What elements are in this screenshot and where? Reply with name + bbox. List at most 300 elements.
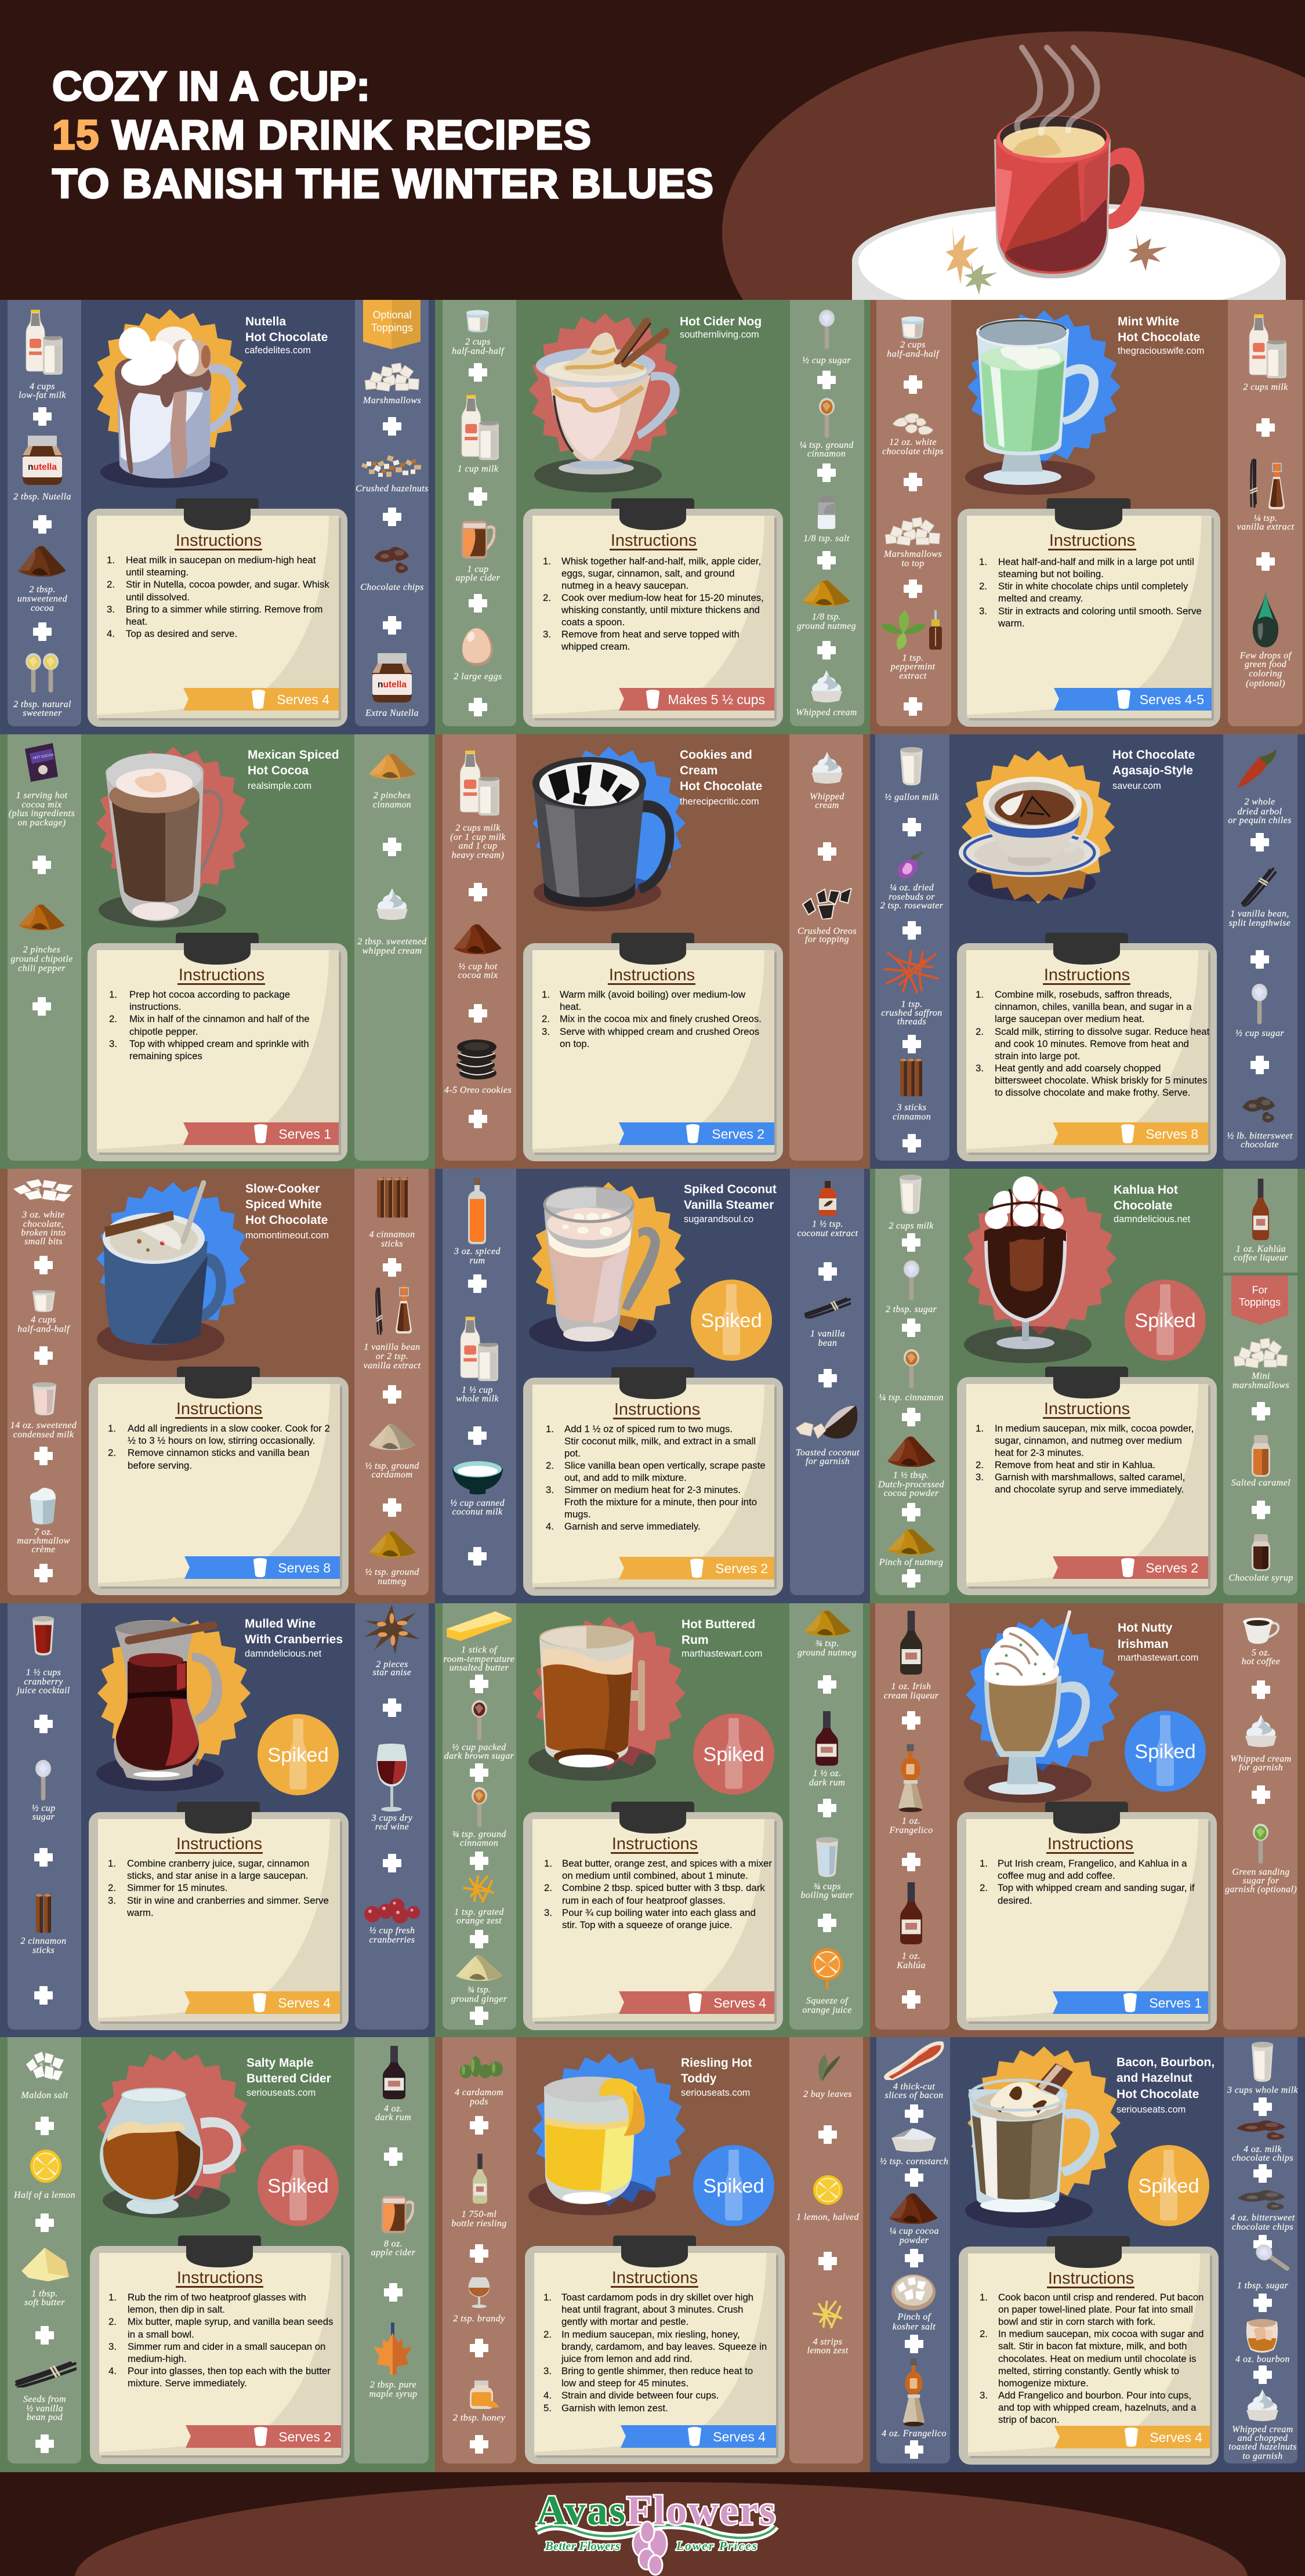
ingredient: vanilla bean or extract: or 2 tsp. xyxy=(376,1352,408,1361)
hero mug xyxy=(994,115,1144,278)
title: Buttered Cider xyxy=(246,2072,331,2085)
left ingredients column xyxy=(443,2037,516,2463)
ingredient: whole milk: 3 cups whole milk xyxy=(1227,2085,1298,2095)
title: Rum xyxy=(682,1633,709,1647)
ingredient: nutmeg: nutmeg xyxy=(378,1577,407,1586)
ingredient: bay leaves xyxy=(803,2055,852,2099)
title: Hot Chocolate xyxy=(245,331,328,344)
icon: plus xyxy=(469,698,487,716)
servings ribbon: Serves 4 xyxy=(278,1995,331,2010)
title: thegraciouswife.com xyxy=(1118,346,1204,356)
ingredient: milk: 2 cups milk xyxy=(455,823,501,833)
icon: plus xyxy=(1253,2097,1272,2116)
icon: plus xyxy=(817,463,836,482)
panel background xyxy=(435,300,870,734)
instruction steps: Prep hot cocoa according to package xyxy=(129,989,290,1000)
ingredient: nutmeg xyxy=(798,1610,857,1658)
ingredient: saffron: 1 tsp. xyxy=(901,999,923,1009)
ingredient: whipped cream and hazelnuts: to garnish xyxy=(1242,2451,1283,2461)
ingredient: cocoa: cocoa xyxy=(31,603,54,613)
icon: plus xyxy=(383,1854,401,1872)
left ingredients column xyxy=(875,1169,949,1595)
title: Mulled Wine xyxy=(245,1617,316,1631)
instruction steps: 1. xyxy=(980,2292,988,2303)
topping: crushed hazelnuts xyxy=(356,455,429,494)
instruction steps: whipped cream. xyxy=(561,641,630,652)
instruction steps: 1. xyxy=(543,2292,552,2303)
instruction steps: on medium until combined, about 1 minute. xyxy=(562,1870,748,1881)
ingredient: orange juice: Squeeze of xyxy=(806,1996,849,2006)
servings ribbon: Serves 1 xyxy=(278,1126,331,1142)
servings ribbon: Serves 4 xyxy=(277,692,329,707)
ingredient: cranberry juice: 1 ½ cups xyxy=(26,1668,61,1678)
ingredient: dark rum xyxy=(809,1711,845,1788)
instruction steps: 4. xyxy=(543,2390,552,2401)
badge: spiked: Spiked xyxy=(701,1310,762,1332)
icon: plus xyxy=(905,2249,923,2267)
ingredient: white chocolate: small bits xyxy=(24,1237,63,1247)
instruction steps: strip of bacon. xyxy=(998,2414,1059,2425)
ingredient: food coloring: green food xyxy=(1245,660,1287,669)
icon: plus xyxy=(469,1110,487,1128)
topping: crushed hazelnuts: Crushed hazelnuts xyxy=(356,484,429,494)
ingredient: peppermint extract: peppermint xyxy=(890,662,936,672)
steam xyxy=(1017,48,1097,133)
icon: plus xyxy=(902,1503,920,1521)
right ingredients column xyxy=(790,300,864,726)
instruction steps: Top with whipped cream and sanding sugar, if xyxy=(998,1882,1195,1893)
ingredient: butter: 1 stick of xyxy=(461,1645,498,1655)
instruction steps: 1. xyxy=(976,1423,984,1434)
topping: whipped cream: Whipped cream xyxy=(1230,1754,1292,1764)
ingredient: soft butter: soft butter xyxy=(24,2298,65,2307)
right ingredients column xyxy=(354,1169,429,1595)
ingredient: hot coffee: hot coffee xyxy=(1242,1657,1280,1666)
banner: for toppings: Toppings xyxy=(1239,1296,1281,1308)
icon: plus xyxy=(1253,2365,1272,2384)
instruction steps: 1. xyxy=(107,555,115,566)
ingredient: marshmallow creme: marshmallow xyxy=(17,1536,70,1546)
ingredient: star anise: star anise xyxy=(373,1668,411,1678)
ingredient: sugar xyxy=(802,310,851,365)
ingredient: cinnamon: ¼ tsp. cinnamon xyxy=(879,1393,944,1403)
icon: plus xyxy=(383,1258,401,1277)
ingredient: Maldon salt xyxy=(20,2052,68,2100)
ingredient: maple syrup: maple syrup xyxy=(369,2389,418,2399)
instruction steps: 2. xyxy=(109,1013,117,1024)
icon: plus xyxy=(34,1346,53,1365)
header brown arch xyxy=(722,31,1305,433)
title: therecipecritic.com xyxy=(680,796,759,807)
ingredient: marshmallows: Marshmallows xyxy=(883,549,942,559)
icon: plus xyxy=(902,1408,920,1426)
ingredient: food coloring xyxy=(1239,592,1292,689)
ingredient: milk chocolate chips: 4 oz. milk xyxy=(1244,2144,1282,2154)
instructions heading: Instructions xyxy=(177,2269,263,2287)
ingredient: cocoa: unsweetened xyxy=(17,594,68,604)
instruction steps: 2. xyxy=(546,1460,554,1471)
ingredient: bittersweet chocolate: chocolate xyxy=(1241,1140,1279,1150)
ingredient: milk xyxy=(458,395,499,474)
title: Mexican Spiced xyxy=(248,748,339,762)
ingredient: butter: room-temperature xyxy=(444,1654,514,1664)
instruction steps: 3. xyxy=(976,1063,984,1074)
ingredient: cinnamon: 2 pinches xyxy=(374,791,411,800)
topping: green sanding sugar: Green sanding xyxy=(1232,1867,1290,1877)
ingredient: vanilla bean: 1 vanilla xyxy=(810,1329,845,1339)
ingredient: cranberries: cranberries xyxy=(369,1935,415,1945)
title: Hot Cocoa xyxy=(248,764,309,777)
ingredient: whipped cream and hazelnuts: toasted hazelnuts xyxy=(1228,2442,1297,2452)
instruction steps: Bring to gentle shimmer, then reduce heat to xyxy=(561,2365,753,2376)
icon: plus xyxy=(470,2006,488,2025)
ingredient: cocoa powder: cocoa powder xyxy=(883,1488,939,1498)
instructions clipboard xyxy=(959,2236,1219,2465)
ingredient: toasted coconut: for garnish xyxy=(806,1457,850,1466)
ingredient: eggs xyxy=(454,628,502,682)
icon: plus xyxy=(1250,833,1269,852)
ingredient: nutmeg: ground nutmeg xyxy=(798,1648,857,1658)
instruction steps: Whisk together half-and-half, milk, apple cider, xyxy=(561,556,761,567)
title: Hot Chocolate xyxy=(1112,748,1195,762)
servings ribbon xyxy=(184,1991,340,2014)
icon: plus xyxy=(818,1675,836,1694)
table with leaves xyxy=(852,203,1286,300)
ingredient: white chocolate xyxy=(13,1179,73,1247)
title xyxy=(680,315,762,340)
ingredient: Kahlua xyxy=(896,1882,926,1970)
ingredient: chiles: or pequín chiles xyxy=(1228,816,1292,825)
icon: plus xyxy=(468,1274,487,1293)
topping: extra Nutella: Extra Nutella xyxy=(365,708,419,718)
drink illustration: buttered rum glass xyxy=(528,1617,686,1781)
instruction steps: 3. xyxy=(109,1038,117,1049)
icon: plus xyxy=(383,1385,401,1404)
instruction steps: 2. xyxy=(108,1882,116,1893)
servings ribbon xyxy=(1053,1122,1208,1145)
title: Vanilla Steamer xyxy=(684,1198,774,1212)
icon: plus xyxy=(818,2125,837,2144)
ingredient: nutmeg: ground nutmeg xyxy=(797,621,856,631)
instructions clipboard xyxy=(90,2236,350,2464)
right ingredients column xyxy=(1223,1603,1297,2030)
instruction steps: 2. xyxy=(976,1459,984,1470)
servings ribbon: Serves 1 xyxy=(1149,1995,1202,2010)
ingredient: honey xyxy=(453,2381,506,2423)
instruction steps: brandy, cardamom, and bay leaves. Squeeze in xyxy=(561,2341,767,2352)
instructions clipboard xyxy=(957,933,1217,1161)
ingredient: whipped cream and hazelnuts: Whipped cream xyxy=(1232,2425,1293,2434)
title xyxy=(1114,1183,1191,1224)
title: TO BANISH THE WINTER BLUES xyxy=(52,161,713,207)
ingredient: milk: heavy cream) xyxy=(452,850,504,860)
title: Hot Cider Nog xyxy=(680,315,762,328)
ingredient: cardamom: ½ tsp. ground xyxy=(365,1461,419,1471)
ingredient: sugar xyxy=(1237,2241,1293,2291)
icon: plus xyxy=(1253,2235,1272,2253)
ingredient: half-and-half xyxy=(452,310,505,356)
ingredient: Frangelico: Frangelico xyxy=(889,1825,933,1835)
ingredient: whipped cream xyxy=(357,888,427,956)
instructions clipboard xyxy=(523,498,783,727)
title: Mint White xyxy=(1118,315,1179,328)
panel background xyxy=(870,1603,1305,2038)
icon: plus xyxy=(1250,1056,1269,1074)
ingredient: Maldon salt: Maldon salt xyxy=(20,2090,68,2100)
icon: plus xyxy=(383,1498,401,1517)
ingredient: vanilla bean: split lengthwise xyxy=(1229,918,1290,928)
icon: plus xyxy=(1252,1680,1270,1699)
instruction steps: 2. xyxy=(108,1447,116,1458)
ingredient: bittersweet chocolate xyxy=(1227,1097,1293,1150)
ingredient: chipotle: chili pepper xyxy=(18,963,66,973)
icon: plus xyxy=(384,2283,403,2302)
ingredient: orange zest: orange zest xyxy=(456,1916,502,1926)
ingredient: cinnamon sticks: 3 sticks xyxy=(897,1103,926,1113)
ingredient: dark rum xyxy=(375,2046,411,2122)
icon: plus xyxy=(469,594,487,613)
icon: plus xyxy=(1252,1402,1270,1421)
ingredient: sugar: ½ cup sugar xyxy=(802,356,851,365)
title: With Cranberries xyxy=(245,1633,343,1646)
header background xyxy=(0,0,1305,300)
drink illustration: blue mug xyxy=(96,1182,249,1361)
ingredient: vanilla bean: 1 vanilla bean, xyxy=(1230,909,1289,919)
ingredient: coconut extract: 1 ½ tsp. xyxy=(812,1219,843,1229)
ingredient: cinnamon sticks: cinnamon xyxy=(893,1112,931,1122)
instructions heading: Instructions xyxy=(612,1835,698,1853)
instruction steps: chipotle pepper. xyxy=(129,1026,198,1037)
ingredient: marshmallows: to top xyxy=(901,559,925,568)
instruction steps: In medium saucepan, mix milk, cocoa powder, xyxy=(995,1423,1194,1434)
banner: for toppings xyxy=(1231,1276,1288,1325)
ingredient: cardamom pods: 4 cardamom xyxy=(455,2088,503,2097)
ingredient: lemon zest: 4 strips xyxy=(813,2337,842,2347)
title: Slow-Cooker xyxy=(245,1182,320,1195)
ingredient: half-and-half: half-and-half xyxy=(887,349,940,359)
instruction steps xyxy=(108,2292,333,2389)
ingredient: milk: (or 1 cup milk xyxy=(450,832,506,842)
instruction steps xyxy=(976,989,1210,1098)
instruction steps: 1. xyxy=(108,1858,116,1869)
ingredient: lemon: 1 lemon, halved xyxy=(796,2212,859,2222)
drink illustration: steamer glass xyxy=(529,1182,685,1352)
ingredient: cardamom pods xyxy=(455,2056,503,2107)
topping: marshmallows: Marshmallows xyxy=(362,396,421,405)
ingredient: red wine xyxy=(371,1744,413,1832)
ingredient: vanilla bean seeds: bean pod xyxy=(27,2412,63,2422)
instructions clipboard xyxy=(525,2236,785,2464)
ingredient: white chocolate chips: chocolate chips xyxy=(882,447,944,456)
ingredient: half-and-half: 2 cups xyxy=(900,340,926,350)
ingredient: white chocolate: chocolate, xyxy=(23,1219,64,1229)
icon: plus xyxy=(1252,1501,1270,1519)
instruction steps: warm. xyxy=(998,618,1025,629)
ingredient: vanilla bean xyxy=(1229,868,1290,928)
icon: plus xyxy=(33,515,52,534)
card: Spiked Coconut Vanilla Steamer xyxy=(435,1169,870,1603)
instruction steps: Add all ingredients in a slow cooker. Cook for 2 xyxy=(128,1423,330,1434)
instructions heading: Instructions xyxy=(1047,1835,1133,1853)
ingredient: lemon zest xyxy=(807,2302,849,2356)
panel background xyxy=(435,2037,870,2472)
title: Irishman xyxy=(1118,1637,1169,1651)
ingredient: cocoa xyxy=(17,546,68,613)
icon: plus xyxy=(34,1848,53,1867)
instruction steps: on top. xyxy=(560,1038,589,1049)
ingredient: ginger: ¾ tsp. xyxy=(467,1985,491,1995)
ingredient: peppermint extract: extract xyxy=(899,671,927,681)
ingredient: Oreo cookies: 4-5 Oreo cookies xyxy=(444,1085,512,1095)
panel background xyxy=(0,300,435,734)
left ingredients column xyxy=(875,734,949,1161)
ingredient: Irish cream xyxy=(884,1611,939,1701)
title: Riesling Hot xyxy=(681,2056,752,2070)
icon: plus xyxy=(1256,418,1275,437)
instructions clipboard xyxy=(958,498,1220,727)
instruction steps: rum in each of four heatproof glasses. xyxy=(562,1895,726,1906)
ingredient: half-and-half xyxy=(17,1290,71,1334)
title: Hot Chocolate xyxy=(1118,331,1200,344)
topping: whipped cream: Whipped xyxy=(810,792,844,802)
left ingredients column xyxy=(443,1169,516,1595)
ingredient: red wine: red wine xyxy=(375,1822,409,1832)
panel background xyxy=(870,300,1305,734)
title xyxy=(245,1182,329,1241)
badge: spiked: Spiked xyxy=(703,1744,764,1766)
title: Cookies and xyxy=(680,748,752,762)
ingredient: salt xyxy=(803,495,850,544)
drink illustration: Irish coffee glass xyxy=(964,1612,1119,1803)
instructions clipboard xyxy=(88,498,347,727)
ingredient: bittersweet chocolate chips: chocolate chips xyxy=(1232,2222,1293,2232)
card: Nutella Hot Chocolate xyxy=(0,300,435,734)
ingredient: nutmeg: ½ tsp. ground xyxy=(365,1567,419,1577)
badge: spiked: Spiked xyxy=(1138,2175,1199,2197)
servings ribbon: Serves 8 xyxy=(278,1560,331,1575)
servings ribbon xyxy=(186,2425,341,2448)
icon: plus xyxy=(34,1986,53,2005)
title: Kahlua Hot xyxy=(1114,1183,1178,1197)
ingredient: half-and-half: half-and-half xyxy=(452,346,505,356)
right ingredients column xyxy=(789,1603,863,2030)
title: Bacon, Bourbon, xyxy=(1116,2056,1215,2069)
instruction steps: ½ to 3 ½ hours on low, stirring occasionally. xyxy=(128,1435,315,1446)
title: southernliving.com xyxy=(680,329,759,340)
icon: plus xyxy=(32,856,51,874)
icon: plus xyxy=(818,1799,836,1817)
title xyxy=(681,2056,752,2098)
topping: whipped cream: for garnish xyxy=(1239,1763,1283,1773)
instructions heading: Instructions xyxy=(1044,966,1130,984)
ingredient: cinnamon: ¼ tsp. ground xyxy=(799,440,854,450)
instruction steps: Pour into glasses, then top each with the butter xyxy=(128,2365,331,2376)
panel background xyxy=(0,1169,435,1603)
icon: plus xyxy=(34,1256,53,1274)
instruction steps: Beat butter, orange zest, and spices with a mixer xyxy=(562,1858,772,1869)
ingredient: natural sweetener: sweetener xyxy=(23,708,62,718)
ingredient: saffron: crushed saffron xyxy=(881,1008,942,1018)
instruction steps: 1. xyxy=(108,2292,117,2303)
icon: plus xyxy=(817,641,836,660)
instruction steps: heat for 2-3 minutes. xyxy=(995,1447,1084,1458)
instruction steps: 3. xyxy=(108,2341,117,2352)
badge: spiked xyxy=(691,1280,772,1361)
title: Spiced White xyxy=(245,1198,322,1211)
ingredient: boiling water: ¾ cups xyxy=(813,1882,841,1892)
ingredient: white chocolate: 3 oz. white xyxy=(21,1210,65,1220)
ingredient: Kahlua: 1 oz. Kahlúa xyxy=(1236,1244,1286,1254)
title: damndelicious.net xyxy=(1114,1214,1191,1224)
ingredient: nutmeg: ¾ tsp. xyxy=(815,1639,839,1649)
title: seriouseats.com xyxy=(246,2088,316,2098)
banner: optional toppings: Optional xyxy=(372,309,412,321)
ingredient: chipotle: 2 pinches xyxy=(23,945,60,955)
servings ribbon: Serves 2 xyxy=(1146,1560,1198,1575)
instruction steps: eggs, sugar, cinnamon, salt, and ground xyxy=(561,568,735,579)
ingredient: Nutella xyxy=(13,436,71,502)
instruction steps: Stir in Nutella, cocoa powder, and sugar. Whisk xyxy=(126,579,329,590)
icon: plus xyxy=(383,1698,401,1717)
ingredient: vanilla bean or extract: 1 vanilla bean xyxy=(364,1342,420,1352)
servings ribbon xyxy=(1053,1556,1208,1579)
ingredient: condensed milk: condensed milk xyxy=(13,1430,74,1440)
icon: plus xyxy=(383,417,401,436)
icon: plus xyxy=(470,1675,488,1693)
ingredient: marshmallow creme: 7 oz. xyxy=(34,1527,53,1537)
instruction steps xyxy=(546,1423,766,1532)
ingredient: low-fat milk: low-fat milk xyxy=(19,390,66,400)
footer brown arch xyxy=(75,2482,1248,2576)
instruction steps: and top with whipped cream, hazelnuts, and a xyxy=(998,2402,1197,2413)
ingredient: dark rum: dark rum xyxy=(375,2113,411,2122)
ingredient: red wine: 3 cups dry xyxy=(371,1813,413,1823)
ingredient: sugar xyxy=(1235,984,1284,1038)
icon: plus xyxy=(905,2104,923,2123)
title: Hot Chocolate xyxy=(245,1213,328,1227)
instruction steps xyxy=(544,1858,772,1930)
panel background xyxy=(870,2037,1305,2472)
ingredient: dark rum: 1 ½ oz. xyxy=(813,1769,842,1778)
ingredient: cranberries: ½ cup fresh xyxy=(369,1926,415,1936)
icon: plus xyxy=(470,1930,488,1948)
ingredient: vanilla bean seeds: ½ vanilla xyxy=(26,2404,63,2414)
instruction steps: In medium saucepan, mix cocoa with sugar and xyxy=(998,2328,1204,2339)
ingredient: low-fat milk: 4 cups xyxy=(30,382,55,392)
ingredient: whipped cream and hazelnuts: and chopped xyxy=(1238,2433,1288,2443)
servings ribbon xyxy=(183,1122,339,1145)
ingredient: vanilla extract: ¼ tsp. xyxy=(1253,513,1278,523)
topping: chocolate syrup xyxy=(1228,1534,1293,1583)
left ingredients column xyxy=(8,300,81,726)
title xyxy=(1116,2056,1215,2115)
icon: plus xyxy=(902,1711,920,1730)
instruction steps: Stir coconut milk, milk, and extract in a small xyxy=(564,1436,756,1447)
instructions clipboard xyxy=(89,1802,349,2030)
ingredient: rosebuds xyxy=(880,852,944,911)
drink illustration: mint glass xyxy=(965,310,1121,495)
ingredient: chiles: 2 whole xyxy=(1244,797,1275,807)
ingredient: rosebuds: 2 tsp. rosewater xyxy=(880,901,944,911)
ingredient: whipped cream: 2 tbsp. sweetened xyxy=(357,937,427,947)
ingredient: vanilla bean or extract: vanilla extract xyxy=(364,1361,421,1371)
title xyxy=(245,1617,343,1659)
ingredient: Frangelico: 4 oz. Frangelico xyxy=(882,2429,947,2439)
instruction steps: Top with whipped cream and sprinkle with xyxy=(129,1038,309,1049)
instruction steps: 2. xyxy=(542,1013,550,1024)
instruction steps: homogenize mixture. xyxy=(998,2378,1089,2389)
instruction steps: 3. xyxy=(546,1484,554,1495)
